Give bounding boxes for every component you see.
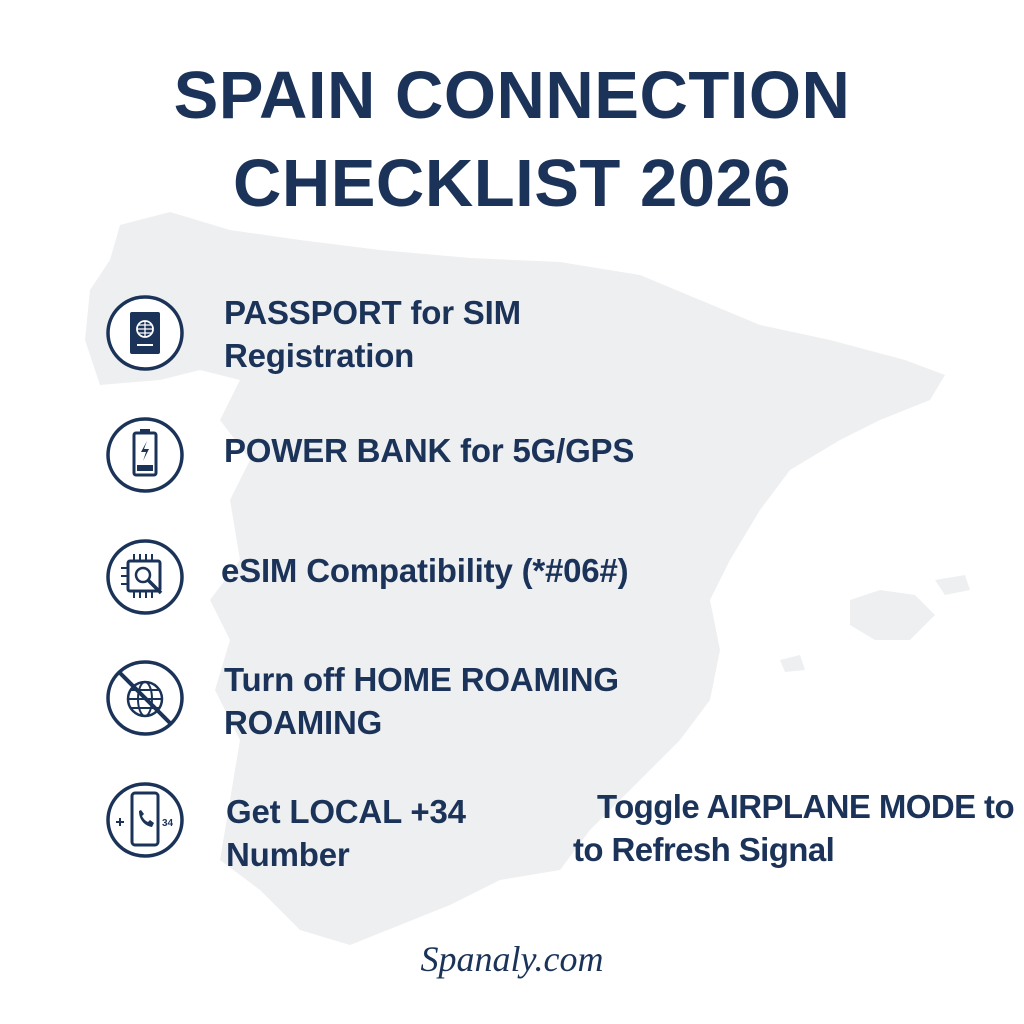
icon: no roaming globe: [106, 660, 184, 736]
icon: phone +34: 34: [162, 818, 174, 829]
text: roaming: [224, 661, 619, 741]
title: SPAIN CONNECTION: [174, 58, 850, 133]
title: CHECKLIST 2026: [233, 146, 791, 221]
text: roaming: ROAMING: [224, 704, 382, 741]
text: passport: PASSPORT for SIM: [224, 294, 521, 331]
text: airplane mode: Toggle AIRPLANE MODE to: [597, 788, 1014, 825]
icon: chip search: [106, 539, 184, 615]
text: local number: Get LOCAL +34: [226, 793, 466, 830]
footer: brand: Spanaly.com: [420, 939, 603, 979]
text: roaming: Turn off HOME ROAMING: [224, 661, 619, 698]
text: local number: Number: [226, 836, 350, 873]
text: airplane mode: [573, 788, 1014, 868]
icon: battery: [106, 417, 184, 493]
text: airplane mode: to Refresh Signal: [573, 831, 834, 868]
title: [174, 58, 850, 221]
icon: passport: [106, 295, 184, 371]
text: local number: [226, 793, 466, 873]
text: esim: eSIM Compatibility (*#06#): [221, 552, 628, 589]
text: passport: [224, 294, 521, 374]
text: power bank: POWER BANK for 5G/GPS: [224, 432, 634, 469]
icon: phone +34: [106, 782, 184, 858]
text: passport: Registration: [224, 337, 414, 374]
